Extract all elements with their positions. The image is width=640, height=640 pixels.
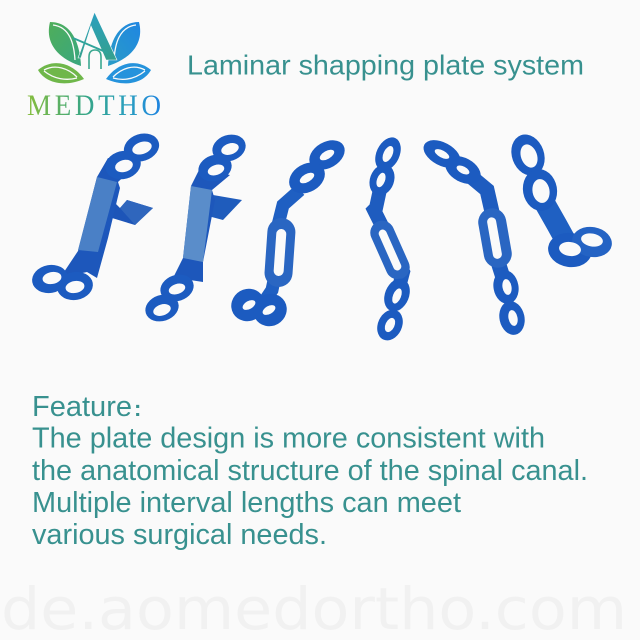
plate 2: narrow bridge with side tab (142, 130, 249, 326)
icon: lotus leaves (38, 22, 151, 83)
logo: Medtho lotus and wordmark (27, 12, 161, 122)
plate 6: short plate with paired rings (506, 130, 614, 270)
feature line 4: various surgical needs. (32, 519, 327, 551)
title: Laminar shapping plate system (187, 50, 584, 80)
plate 1: wide bridge with side tab (30, 129, 163, 303)
icon: letter A monogram (73, 12, 117, 69)
plate 5: curved slotted plate (419, 134, 528, 337)
feature heading colon: : (134, 396, 141, 421)
feature line 1: The plate design is more consistent with (32, 422, 545, 454)
wordmark: MEDTHO: MEDTHO (27, 90, 161, 122)
plate 4: S-curved slotted plate (365, 133, 414, 345)
feature text block (32, 391, 588, 551)
plate 3: slotted plate, angled rings (225, 134, 350, 332)
feature line 2: the anatomical structure of the spinal canal. (32, 455, 588, 487)
plates illustration (30, 129, 614, 345)
feature line 3: Multiple interval lengths can meet (32, 487, 461, 519)
feature heading: Feature (32, 391, 132, 423)
